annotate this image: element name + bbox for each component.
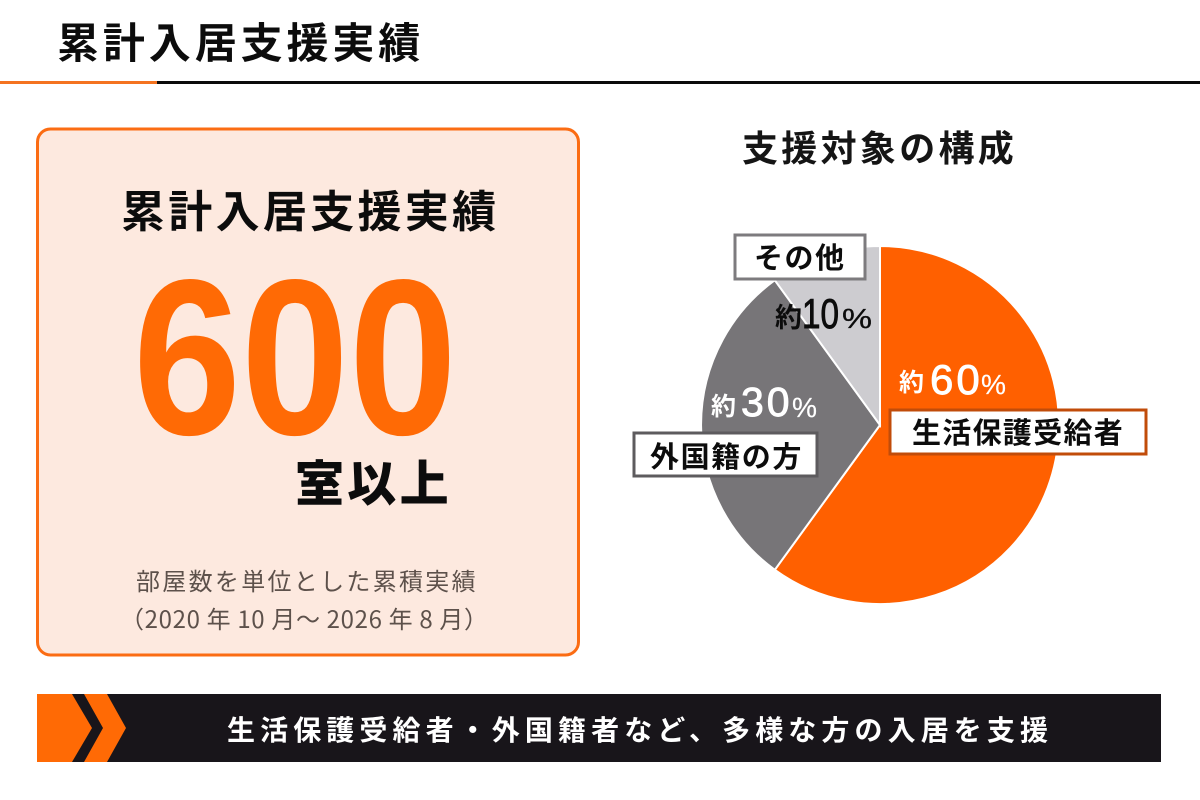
panel: cumulative support record: [38, 129, 578, 655]
note text: （2020 年 10 月～ 2026 年 8 月）: [120, 600, 488, 635]
value: about 60%: 約: [899, 363, 924, 399]
value: about 10%: %: [842, 303, 872, 334]
value: about 60%: 60: [930, 356, 983, 403]
label: others: [735, 235, 865, 279]
label: welfare recipients: 生活保護受給者: [912, 410, 1124, 452]
title: [0, 10, 1200, 84]
chart heading: 支援対象の構成: [742, 120, 1017, 172]
value: about 30%: 30: [741, 379, 793, 425]
value: about 30%: 約: [711, 387, 736, 423]
value: about 60%: %: [981, 369, 1006, 400]
bottom banner: [37, 694, 1161, 762]
value: about 10%: 約: [775, 296, 802, 335]
value: about 10%: 10: [802, 290, 839, 337]
pie chart: [701, 246, 1059, 604]
value: about 30%: [711, 379, 817, 425]
note text: [120, 562, 488, 635]
slice: 30%: [701, 280, 880, 570]
label: others: その他: [754, 235, 846, 277]
banner text: 生活保護受給者・外国籍者など、多様な方の入居を支援: [227, 709, 1053, 749]
value: about 10%: [775, 290, 872, 337]
value: about 60%: [899, 356, 1006, 403]
unit text: 室以上: [295, 445, 452, 516]
title: 累計入居支援実績: [57, 10, 424, 71]
slice: 60%: [775, 246, 1059, 604]
label: foreign nationals: 外国籍の方: [650, 434, 803, 476]
big number 600: 600: [133, 234, 457, 482]
note text: 部屋数を単位とした累積実績: [136, 562, 478, 597]
icon: double chevron: [37, 694, 126, 762]
panel heading: 累計入居支援実績: [121, 176, 499, 240]
slice: 10%: [775, 246, 880, 425]
value: about 30%: %: [792, 392, 817, 423]
